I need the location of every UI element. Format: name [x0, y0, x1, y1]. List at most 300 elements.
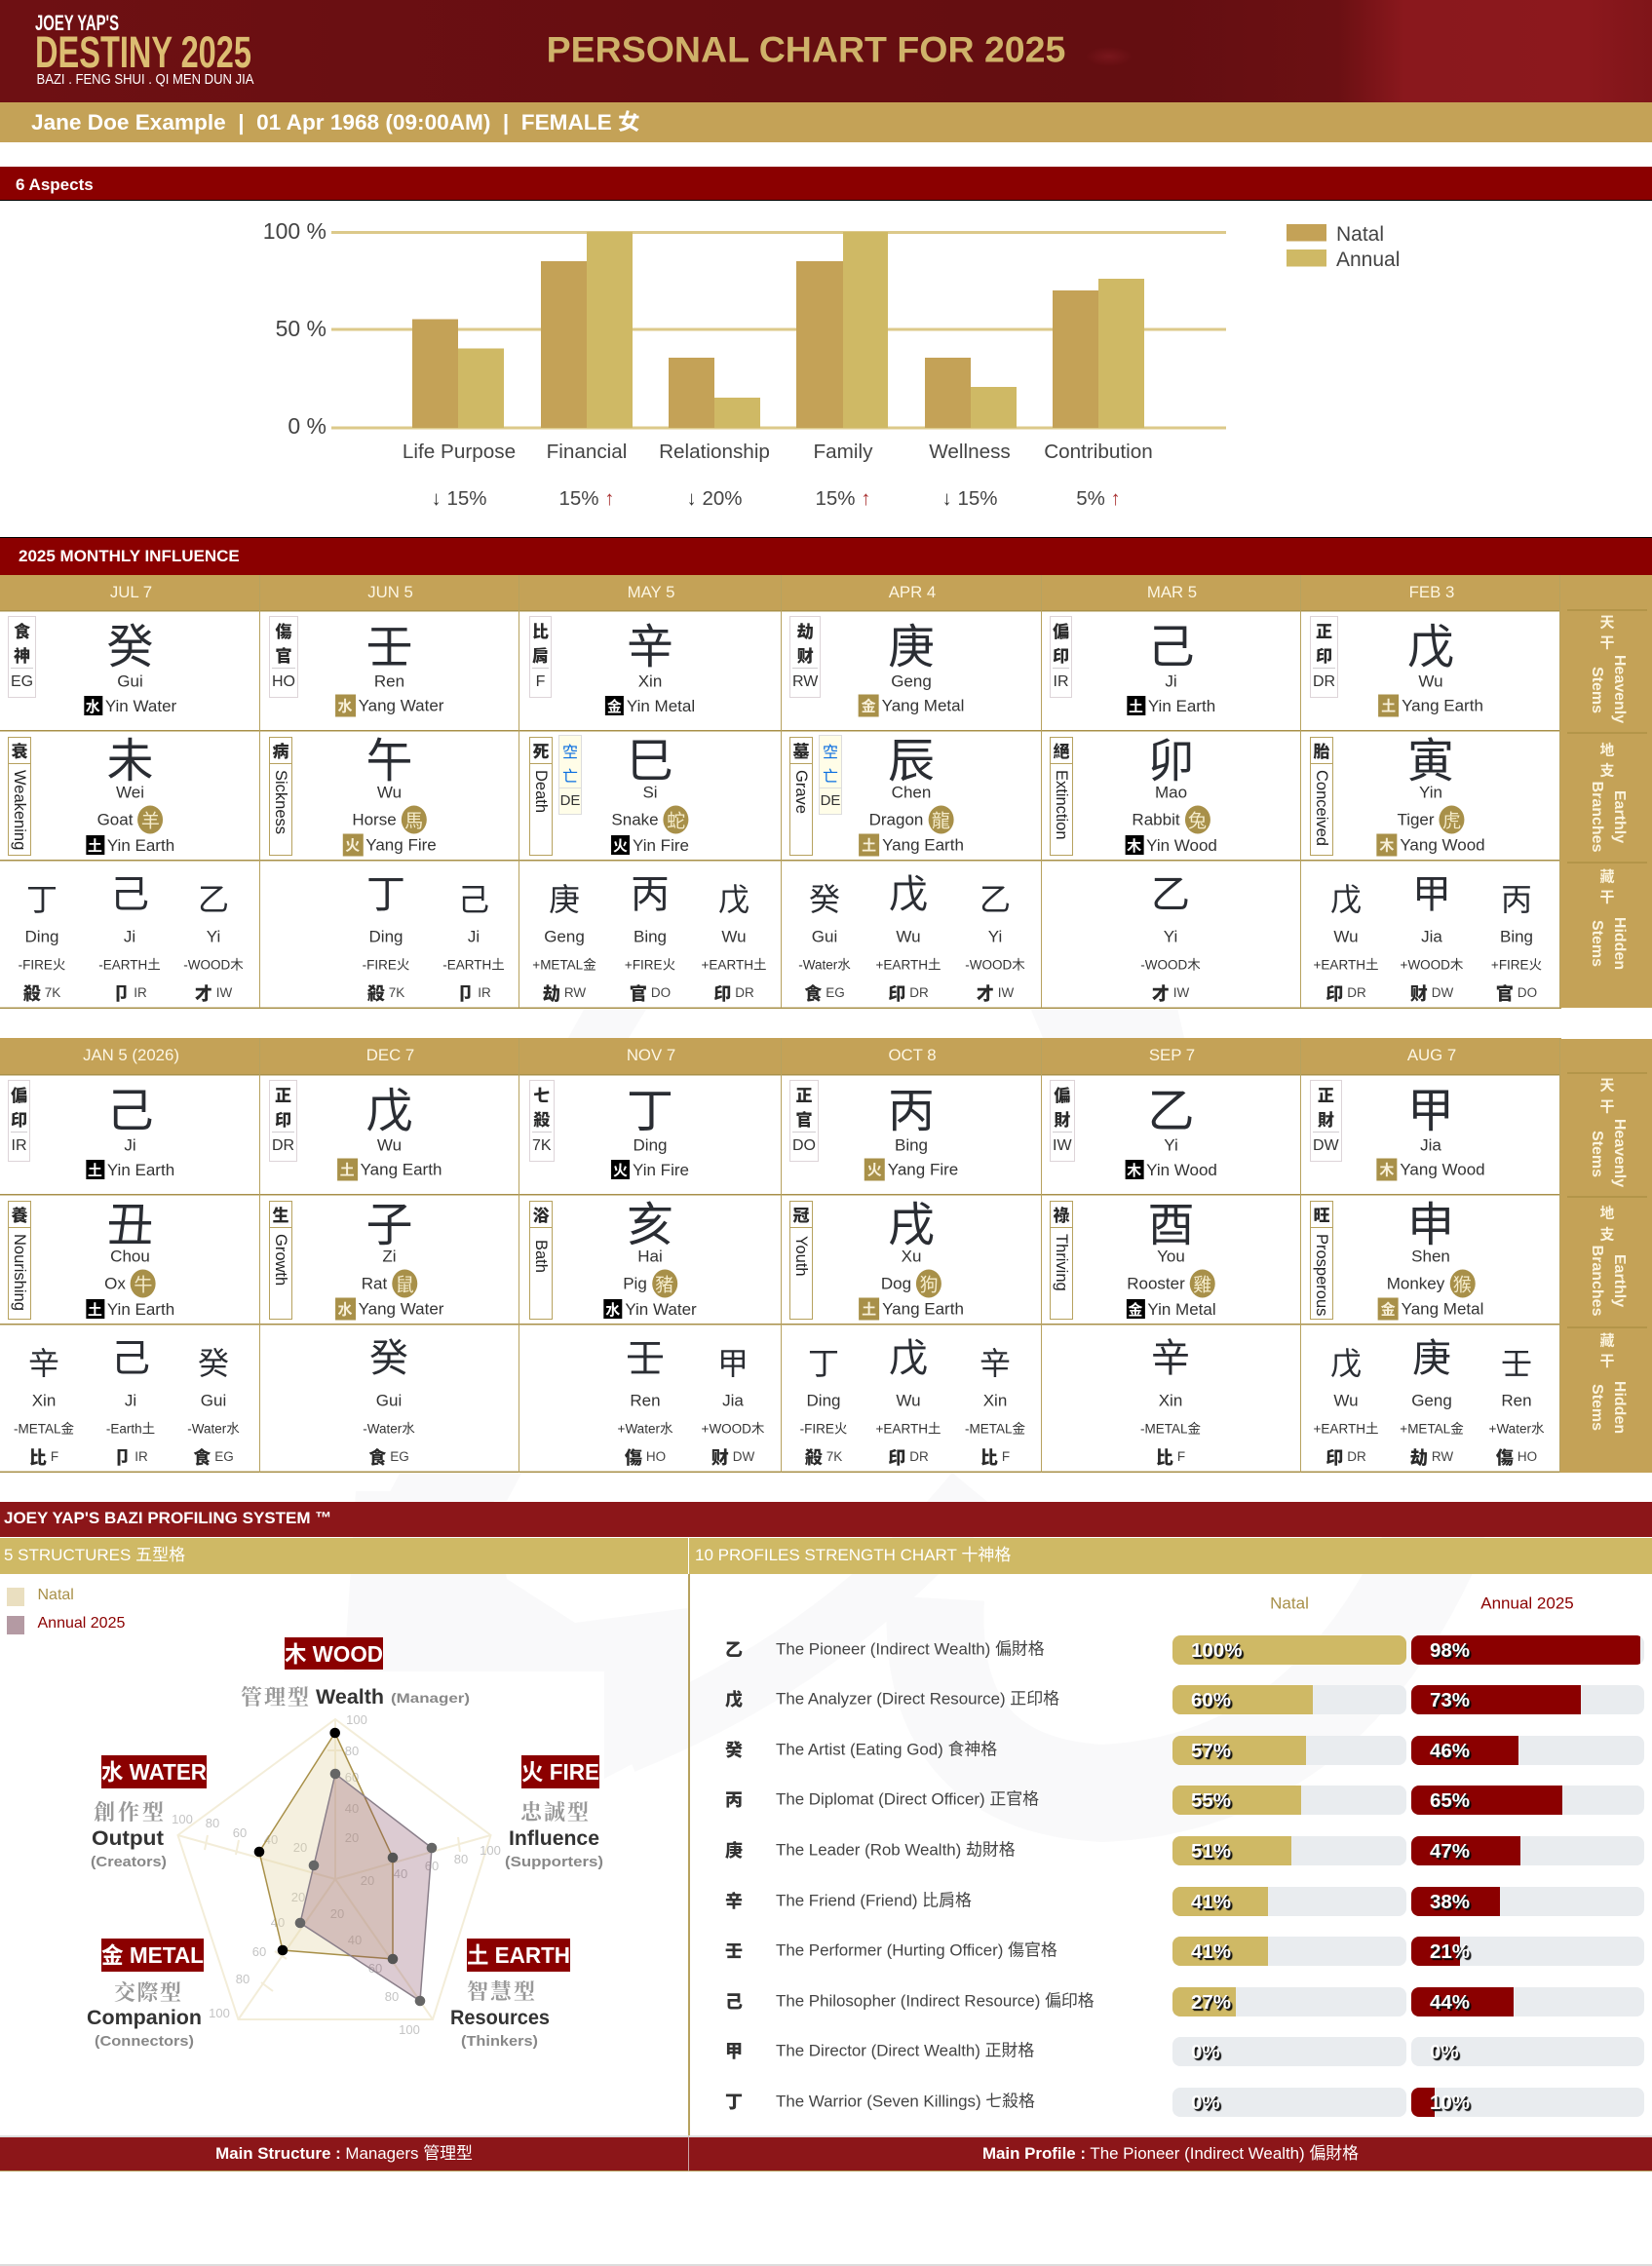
earthly branch cell: Yin Fire — [633, 836, 689, 854]
hidden stems cell: 才 — [1152, 980, 1170, 1006]
profile: The Performer: 壬 — [725, 1938, 743, 1963]
hidden stems cell — [1041, 860, 1301, 1009]
panel: NOV 7 — [519, 1038, 781, 1473]
earthly branch cell: Hai — [637, 1248, 663, 1265]
row labels sidebar: Earthly — [1611, 790, 1628, 843]
heavenly stem cell: Yi — [1164, 1136, 1178, 1154]
hidden stems cell: 丁 — [366, 862, 405, 918]
earthly branch cell: 狗 — [920, 1270, 939, 1296]
hidden stems cell: 乙 — [198, 875, 229, 920]
heavenly stem cell: 土 — [340, 1160, 355, 1179]
heavenly stem cell: 己 — [1147, 608, 1195, 676]
row labels sidebar: Earthly — [1611, 1254, 1628, 1307]
month heading — [1041, 575, 1301, 610]
hidden stems cell: 食 — [193, 1444, 211, 1470]
heavenly stem cell: 金 — [607, 696, 622, 715]
profile: The Friend — [725, 1887, 1644, 1916]
heavenly stem cell: 比 — [532, 618, 549, 642]
hidden stems cell: 官 — [1496, 980, 1514, 1006]
heavenly stem cell: 印 — [11, 1106, 27, 1131]
earthly branch cell: Wei — [116, 784, 144, 801]
heavenly stem cell: 庚 — [888, 608, 935, 676]
hidden stems cell: Ji — [468, 928, 480, 945]
heading: BaZi profiling system — [0, 1502, 1652, 1537]
hidden stems cell: Gui — [201, 1392, 226, 1409]
hidden stems cell: Xin — [32, 1392, 56, 1409]
earthly branch cell: Chou — [110, 1248, 150, 1265]
heavenly stem cell: Yin Metal — [627, 696, 695, 715]
heavenly stem cell — [781, 1074, 1042, 1194]
profile: The Artist: 57% — [1191, 1740, 1231, 1762]
logo — [35, 11, 254, 88]
row labels sidebar: Heavenly — [1611, 1119, 1628, 1187]
heavenly stem cell: 壬 — [365, 608, 413, 676]
heavenly stem cell: Yin Earth — [1148, 696, 1215, 715]
row labels sidebar: Stems — [1589, 920, 1605, 967]
hidden stems cell: 戊 — [1330, 875, 1362, 920]
earthly branch cell: Wu — [377, 784, 402, 801]
earthly branch cell: Yang Earth — [882, 1300, 964, 1318]
earthly branch cell: 水 — [338, 1298, 353, 1320]
heavenly stem cell: 正 — [275, 1082, 291, 1106]
profile: The Leader: 51% — [1191, 1840, 1231, 1863]
hidden stems cell: Ren — [1501, 1392, 1532, 1409]
heavenly stem cell — [259, 1074, 519, 1194]
row labels sidebar: 支 — [1599, 760, 1615, 780]
main profile footer — [689, 2135, 1652, 2171]
earthly branch cell: Pig — [623, 1274, 647, 1292]
earthly branch cell: 亡 — [562, 763, 578, 787]
radar tick labels: 40 — [264, 1832, 278, 1847]
month heading: JUL 7 — [110, 583, 152, 601]
earthly branch cell: 墓 — [793, 738, 809, 762]
bar chart: 6 aspects: 15% ↑ — [816, 487, 870, 510]
panel: JUL 7 — [0, 575, 259, 1009]
heavenly stem cell: 水 — [338, 696, 353, 715]
hidden stems cell: 戊 — [889, 862, 928, 918]
earthly branch cell: 申 — [1407, 1185, 1454, 1253]
hidden stems cell: IW — [1173, 985, 1189, 1000]
radar tick labels: 60 — [345, 1770, 359, 1785]
radar tick labels: 20 — [361, 1873, 374, 1888]
earthly branch cell: Horse — [352, 810, 397, 828]
hidden stems cell: +EARTH土 — [876, 957, 941, 972]
earthly branch cell: 金 — [1381, 1298, 1396, 1320]
row labels sidebar: 天 — [1599, 1074, 1615, 1095]
hidden stems cell: F — [1002, 1449, 1010, 1464]
hidden stems cell: DO — [1518, 985, 1537, 1000]
panel: JUN 5 — [260, 575, 519, 1009]
profile: The Performer: The Performer (Hurting Officer) 傷官格 — [776, 1941, 1057, 1960]
earthly branch cell: Yang Wood — [1400, 836, 1485, 854]
hidden stems cell: +METAL金 — [1400, 1421, 1464, 1436]
month heading — [1300, 1038, 1561, 1074]
heavenly stem cell: RW — [792, 673, 818, 690]
earthly branch cell — [259, 730, 519, 860]
heavenly stem cell: F — [536, 673, 545, 690]
hidden stems cell: 殺 — [805, 1444, 823, 1470]
heavenly stem cell: 劫 — [797, 618, 814, 642]
earthly branch cell: Yin Earth — [107, 1300, 174, 1318]
hidden stems cell: Gui — [376, 1392, 402, 1409]
earthly branch cell: 火 — [613, 834, 628, 856]
earthly branch cell — [0, 1194, 260, 1324]
hidden stems cell: IW — [998, 985, 1014, 1000]
hidden stems cell: 戊 — [889, 1325, 928, 1382]
heavenly stem cell: 印 — [275, 1106, 291, 1131]
hidden stems cell: -WOOD木 — [183, 957, 244, 972]
profile: The Performer: 41% — [1191, 1940, 1231, 1963]
hidden stems cell: -WOOD木 — [1140, 957, 1201, 972]
row labels sidebar: Stems — [1589, 667, 1605, 713]
earthly branch cell: Yin — [1419, 784, 1442, 801]
hidden stems cell: EG — [826, 985, 845, 1000]
earthly branch cell: Yin Water — [625, 1300, 697, 1318]
bar chart: 6 aspects: Annual — [1336, 249, 1400, 271]
hidden stems cell: 官 — [630, 980, 647, 1006]
earthly branch cell: Monkey — [1387, 1274, 1444, 1292]
hidden stems cell: -EARTH土 — [98, 957, 161, 972]
hidden stems cell: Bing — [634, 928, 667, 945]
earthly branch cell: Shen — [1411, 1248, 1450, 1265]
profile: The Analyzer: The Analyzer (Direct Resource) 正印格 — [776, 1690, 1059, 1709]
hidden stems cell: 傷 — [625, 1444, 642, 1470]
hidden stems cell: HO — [1518, 1449, 1537, 1464]
earthly branch cell: 雞 — [1193, 1270, 1211, 1296]
row labels sidebar: 干 — [1599, 887, 1615, 906]
earthly branch cell: 空 — [562, 739, 578, 762]
heavenly stem cell: 木 — [1127, 1160, 1141, 1179]
heavenly stem cell: 七 — [533, 1082, 550, 1106]
hidden stems cell: +Water水 — [1489, 1421, 1544, 1436]
hidden stems cell: 丙 — [1501, 875, 1532, 920]
person details bar: Jane Doe Example | 01 Apr 1968 (09:00AM) | FEMALE 女 — [31, 110, 640, 134]
hidden stems cell: -Water水 — [363, 1421, 415, 1436]
heavenly stem cell: Yang Earth — [1402, 696, 1483, 715]
row labels sidebar: Hidden — [1611, 1381, 1628, 1434]
earthly branch cell: Xu — [902, 1248, 921, 1265]
hidden stems cell: 己 — [458, 875, 489, 920]
heavenly stem cell: Bing — [895, 1136, 928, 1154]
heading: BaZi profiling system: JOEY YAP'S BAZI PROFILING SYSTEM ™ — [4, 1509, 331, 1527]
heavenly stem cell: IR — [12, 1137, 27, 1154]
hidden stems cell: Yi — [1164, 928, 1177, 945]
profile: The Director: 0% — [1430, 2041, 1459, 2063]
radar chart: 5 structures: 土 EARTH — [467, 1942, 570, 1968]
earthly branch cell: 木 — [1379, 834, 1394, 856]
earthly branch cell: Snake — [611, 810, 659, 828]
structure captions: (Connectors) — [95, 2033, 194, 2050]
heavenly stem cell — [1041, 1074, 1301, 1194]
earthly branch cell: 木 — [1127, 834, 1141, 856]
hidden stems cell: 己 — [110, 862, 149, 918]
hidden stems cell: +EARTH土 — [702, 957, 766, 972]
profile: The Performer — [725, 1937, 1644, 1966]
hidden stems cell: 乙 — [980, 875, 1011, 920]
profile: The Warrior: The Warrior (Seven Killings) 七殺格 — [776, 2093, 1035, 2111]
earthly branch cell: Tiger — [1397, 810, 1435, 828]
earthly branch cell: Chen — [892, 784, 931, 801]
hidden stems cell: Yi — [988, 928, 1002, 945]
hidden stems cell: 庚 — [549, 875, 580, 920]
heavenly stem cell: 正 — [1316, 618, 1332, 642]
hidden stems cell: Yi — [207, 928, 220, 945]
logo: BAZI . FENG SHUI . QI MEN DUN JIA — [37, 72, 254, 88]
profile: The Performer: 21% — [1430, 1940, 1470, 1963]
row labels sidebar: 天 — [1599, 612, 1615, 632]
hidden stems cell: 辛 — [28, 1339, 59, 1384]
bar chart: 6 aspects — [263, 218, 1400, 510]
hidden stems cell: 才 — [977, 980, 994, 1006]
earthly branch cell: 土 — [88, 1298, 102, 1320]
radar tick labels: 100 — [399, 2022, 420, 2037]
bar chart: 6 aspects: 5% ↑ — [1076, 487, 1121, 510]
earthly branch cell: 丑 — [106, 1185, 154, 1253]
row labels sidebar: 支 — [1599, 1224, 1615, 1244]
profile: The Leader: 庚 — [725, 1837, 743, 1863]
panel: SEP 7 — [1042, 1038, 1300, 1473]
month heading: MAY 5 — [628, 583, 674, 601]
heavenly stem cell: EG — [11, 673, 33, 690]
earthly branch cell — [1041, 730, 1301, 860]
earthly branch cell: 未 — [106, 721, 154, 789]
hidden stems cell: 癸 — [369, 1325, 408, 1382]
earthly branch cell: Si — [642, 784, 658, 801]
heavenly stem cell: DR — [1313, 673, 1335, 690]
panel: AUG 7 — [1301, 1038, 1561, 1473]
heavenly stem cell: 正 — [1318, 1082, 1334, 1106]
heavenly stem cell: 食 — [14, 618, 30, 642]
heavenly stem cell: 火 — [613, 1160, 628, 1179]
hidden stems cell — [259, 1324, 519, 1473]
heading: 6 Aspects: 6 Aspects — [16, 175, 94, 194]
earthly branch cell: 馬 — [404, 806, 423, 832]
profile: The Philosopher — [725, 1987, 1644, 2016]
hidden stems cell — [0, 860, 260, 1009]
legend: Annual 2025 — [37, 1615, 125, 1632]
structure captions: Wealth — [316, 1686, 384, 1709]
earthly branch cell: Thriving — [1053, 1234, 1070, 1291]
radar tick labels: 100 — [346, 1712, 367, 1727]
hidden stems cell: F — [51, 1449, 58, 1464]
earthly branch cell — [781, 1194, 1042, 1324]
earthly branch cell: Zi — [382, 1248, 397, 1265]
month heading: FEB 3 — [1409, 583, 1454, 601]
hidden stems cell: +FIRE火 — [625, 957, 675, 972]
heavenly stem cell: 財 — [1318, 1106, 1334, 1131]
heavenly stem cell: 印 — [1316, 642, 1332, 667]
heavenly stem cell — [519, 1074, 782, 1194]
heavenly stem cell: 財 — [1054, 1106, 1070, 1131]
heavenly stem cell: Yang Wood — [1400, 1160, 1485, 1179]
earthly branch cell: Youth — [792, 1236, 810, 1277]
hidden stems cell: +WOOD木 — [702, 1421, 764, 1436]
row labels sidebar: 藏 — [1599, 1329, 1615, 1351]
month heading: JUN 5 — [367, 583, 413, 601]
heavenly stem cell: Ren — [374, 672, 404, 690]
heavenly stem cell — [0, 1074, 260, 1194]
bar chart: 6 aspects: Family — [814, 441, 873, 463]
heavenly stem cell: 金 — [862, 696, 876, 715]
bar chart: 6 aspects: 50 % — [276, 316, 327, 341]
hidden stems cell: -FIRE火 — [19, 957, 65, 972]
profile: The Philosopher: 己 — [725, 1988, 743, 2014]
heavenly stem cell: DR — [272, 1137, 294, 1154]
earthly branch cell — [259, 1194, 519, 1324]
earthly branch cell: 衰 — [12, 738, 27, 762]
month heading — [259, 575, 519, 610]
hidden stems cell: Ding — [25, 928, 58, 945]
structure captions: 忠誠型 — [520, 1800, 589, 1824]
hidden stems cell: -METAL金 — [14, 1421, 74, 1436]
panel: 10 profiles strength chart — [725, 1594, 1644, 2117]
radar tick labels: 40 — [271, 1915, 285, 1930]
panel: MAR 5 — [1042, 575, 1300, 1009]
heavenly stem cell: Wu — [1418, 672, 1443, 690]
annual polygon — [300, 1774, 432, 2001]
hidden stems cell: Ji — [124, 928, 135, 945]
hidden stems cell: 印 — [713, 980, 731, 1006]
row labels sidebar: 干 — [1599, 632, 1615, 653]
hidden stems cell: DO — [651, 985, 671, 1000]
row labels sidebar: Branches — [1589, 1246, 1605, 1316]
hidden stems cell: DR — [735, 985, 754, 1000]
earthly branch cell: You — [1157, 1248, 1185, 1265]
heavenly stem cell: 傷 — [275, 618, 292, 642]
hidden stems cell: 乙 — [1151, 862, 1190, 918]
hidden stems cell: +Water水 — [618, 1421, 672, 1436]
hidden stems cell: RW — [564, 985, 586, 1000]
radar tick labels — [172, 1712, 501, 2037]
hidden stems cell: -EARTH土 — [442, 957, 505, 972]
heavenly stem cell — [781, 610, 1042, 730]
profile: The Philosopher: The Philosopher (Indirect Resource) 偏印格 — [776, 1992, 1095, 2011]
hidden stems cell — [1300, 1324, 1561, 1473]
heavenly stem cell: 正 — [795, 1082, 813, 1106]
earthly branch cell: 辰 — [888, 721, 935, 789]
earthly branch cell — [0, 730, 260, 860]
earthly branch cell: 羊 — [141, 806, 160, 832]
heavenly stem cell: Yang Earth — [361, 1160, 442, 1179]
logo: JOEY YAP'S — [35, 11, 119, 35]
profile: The Diplomat: 丙 — [725, 1786, 743, 1812]
earthly branch cell: 戌 — [888, 1185, 935, 1253]
radar tick labels: 20 — [291, 1890, 305, 1904]
hidden stems cell: 财 — [1410, 980, 1428, 1006]
hidden stems cell: HO — [646, 1449, 666, 1464]
hidden stems cell: +EARTH土 — [1314, 957, 1378, 972]
heavenly stem cell: Yang Metal — [882, 696, 964, 715]
panel: FEB 3 — [1301, 575, 1561, 1009]
hidden stems cell: F — [1177, 1449, 1185, 1464]
profile: The Pioneer: The Pioneer (Indirect Wealth) 偏財格 — [776, 1640, 1045, 1659]
profile: The Director: 甲 — [725, 2038, 743, 2063]
hidden stems cell: 劫 — [1410, 1444, 1428, 1470]
structure captions: Influence — [509, 1827, 599, 1850]
radar tick labels: 60 — [368, 1961, 382, 1976]
profile: The Director: 0% — [1191, 2041, 1220, 2063]
hidden stems cell: 壬 — [1501, 1339, 1532, 1384]
radar tick labels: 20 — [345, 1830, 359, 1845]
legend — [7, 1587, 125, 1634]
earthly branch cell: Bath — [532, 1240, 550, 1273]
earthly branch cell: 土 — [862, 834, 876, 856]
heavenly stem cell: 木 — [1379, 1160, 1394, 1179]
hidden stems cell: Xin — [983, 1392, 1007, 1409]
profile: The Diplomat: The Diplomat (Direct Officer) 正官格 — [776, 1790, 1039, 1809]
panel: OCT 8 — [782, 1038, 1041, 1473]
hidden stems cell: Geng — [544, 928, 585, 945]
month heading — [519, 1038, 782, 1074]
earthly branch cell: Ox — [104, 1274, 126, 1292]
main structure footer: Main Structure : Managers 管理型 — [215, 2144, 473, 2163]
row labels sidebar: 地 — [1599, 1203, 1615, 1222]
earthly branch cell: 水 — [605, 1298, 620, 1320]
hidden stems cell — [259, 860, 519, 1009]
heavenly stem cell: 神 — [14, 642, 30, 667]
earthly branch cell: DE — [821, 792, 840, 809]
hidden stems cell: 庚 — [1412, 1325, 1451, 1382]
earthly branch cell: Yin Wood — [1146, 836, 1217, 854]
profile: The Leader: 47% — [1430, 1840, 1470, 1863]
profile: The Philosopher: 44% — [1430, 1991, 1470, 2014]
hidden stems cell: 戊 — [718, 875, 749, 920]
hidden stems cell: Wu — [896, 1392, 921, 1409]
hidden stems cell: -FIRE火 — [800, 1421, 847, 1436]
radar tick labels: 40 — [348, 1933, 362, 1947]
panel: MAY 5 — [519, 575, 781, 1009]
heavenly stem cell: 7K — [532, 1137, 552, 1154]
heavenly stem cell — [1300, 1074, 1561, 1194]
bar chart: 6 aspects: Relationship — [659, 441, 770, 463]
bar chart: 6 aspects: ↓ 15% — [942, 487, 997, 510]
profile: The Analyzer: 73% — [1430, 1689, 1470, 1711]
earthly branch cell: Prosperous — [1313, 1234, 1330, 1316]
heavenly stem cell: Yin Fire — [633, 1160, 689, 1179]
hidden stems cell — [519, 1324, 782, 1473]
radar chart: 5 structures: 金 METAL — [101, 1942, 204, 1968]
hidden stems cell: 印 — [1325, 980, 1343, 1006]
month heading: APR 4 — [889, 583, 936, 601]
earthly branch cell: Goat — [97, 810, 133, 828]
structure captions: (Manager) — [391, 1690, 470, 1706]
hidden stems cell: 甲 — [1412, 862, 1451, 918]
earthly branch cell: 火 — [345, 834, 360, 856]
heavenly stem cell — [0, 610, 260, 730]
natal polygon — [259, 1733, 393, 1959]
month heading — [1041, 1038, 1301, 1074]
earthly branch cell: 浴 — [532, 1202, 550, 1226]
hidden stems cell: 比 — [1156, 1444, 1173, 1470]
earthly branch cell — [1041, 1194, 1301, 1324]
hidden stems cell: Jia — [722, 1392, 744, 1409]
earthly branch cell: 養 — [12, 1202, 27, 1226]
month heading: JAN 5 (2026) — [83, 1046, 179, 1064]
heavenly stem cell: 丁 — [627, 1072, 673, 1140]
earthly branch cell: Rat — [362, 1274, 387, 1292]
radar tick labels: 100 — [480, 1843, 501, 1858]
radar tick labels: 40 — [345, 1801, 359, 1816]
radar tick labels: 80 — [454, 1852, 468, 1866]
hidden stems cell: +WOOD木 — [1401, 957, 1463, 972]
earthly branch cell: Rabbit — [1132, 810, 1180, 828]
heavenly stem cell: 官 — [795, 1106, 813, 1131]
profile: The Friend: 辛 — [725, 1888, 743, 1913]
heavenly stem cell: 乙 — [1147, 1072, 1195, 1140]
heavenly stem cell: 戊 — [1407, 608, 1454, 676]
hidden stems cell: 印 — [1325, 1444, 1343, 1470]
earthly branch cell: 病 — [273, 738, 288, 762]
